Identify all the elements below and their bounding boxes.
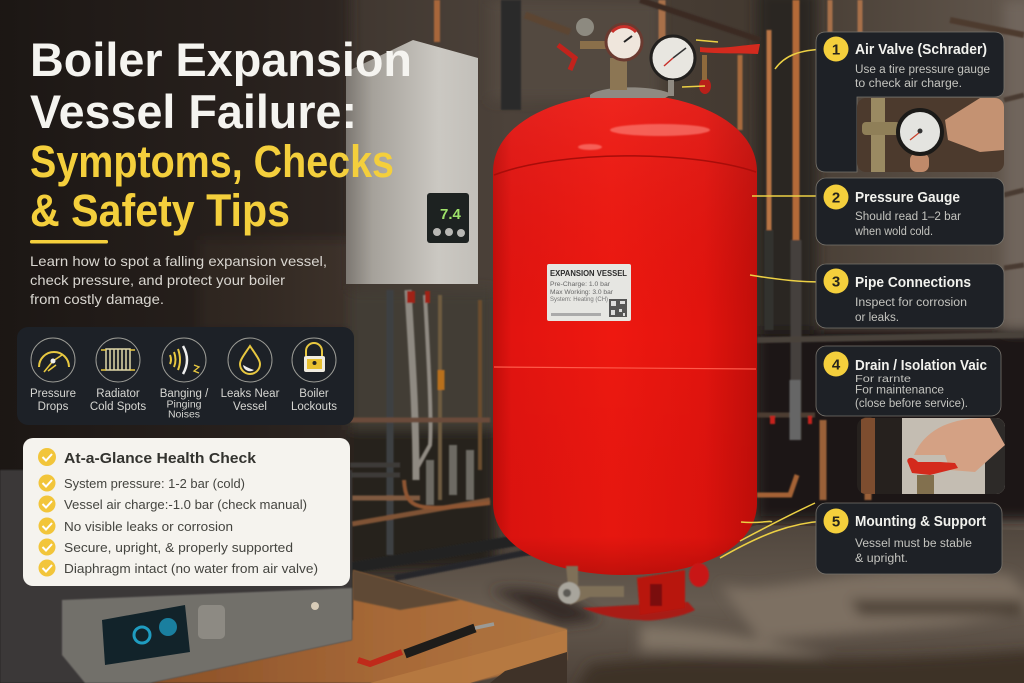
boiler unit [346, 40, 478, 284]
callout 3: pipe connections: Inspect for corrosion [855, 297, 967, 309]
subtitle: from costly damage. [30, 291, 164, 307]
label: leaks near vessel: Vessel [233, 401, 267, 413]
photo: hand on red valve [857, 418, 1005, 494]
callout 4: drain isolation valve: (close before service). [855, 398, 968, 410]
label: banging noises: Noises [168, 408, 200, 420]
check item: leaks: No visible leaks or corrosion [64, 519, 233, 534]
red expansion vessel [493, 94, 757, 575]
subtitle: check pressure, and protect your boiler [30, 272, 285, 288]
callout 1: air valve: Use a tire pressure gauge [855, 64, 990, 76]
title [30, 33, 412, 236]
callout 5: mounting and support: Mounting & Support [855, 514, 986, 530]
title: & Safety Tips [30, 185, 290, 236]
check item: system pressure: System pressure: 1-2 bar (cold) [64, 476, 245, 491]
vessel label [547, 264, 631, 321]
icon: padlock [292, 338, 336, 382]
callout 2: pressure gauge: 2 [832, 190, 840, 206]
label: boiler lockouts: Lockouts [291, 401, 337, 413]
icon: banging noise [162, 338, 206, 382]
machine screen [102, 605, 190, 665]
leader lines [682, 40, 825, 558]
background: concrete floor [395, 525, 1024, 683]
callout 1: air valve [816, 32, 1004, 172]
callout 1: air valve: 1 [832, 42, 840, 58]
vessel label: EXPANSION VESSEL [550, 269, 627, 278]
callout 2: pressure gauge: Should read 1–2 bar [855, 211, 961, 223]
label: pressure drops: Drops [38, 401, 69, 413]
callout 3: pipe connections: 3 [832, 274, 840, 290]
icon: leak droplet [228, 338, 272, 382]
label: radiator cold spots: Radiator [96, 388, 140, 400]
vessel label: Pre-Charge: 1.0 bar [550, 281, 611, 288]
callout 1: air valve: Air Valve (Schrader) [855, 42, 987, 58]
heading: At-a-Glance Health Check [64, 450, 257, 467]
label: leaks near vessel: Leaks Near [221, 388, 279, 400]
callout 4: drain isolation valve: 4 [832, 356, 841, 374]
title: Symptoms, Checks [30, 136, 394, 187]
callout 3: pipe connections: Pipe Connections [855, 275, 971, 291]
icon: pressure drops gauge [31, 338, 75, 382]
callout 3: pipe connections [816, 264, 1004, 328]
callout 2: pressure gauge [816, 178, 1004, 245]
check item: diaphragm: Diaphragm intact (no water from air valve) [64, 561, 318, 576]
tool on bench [358, 624, 494, 664]
callout 4: drain isolation valve: For maintenance [855, 384, 944, 396]
callout 5: mounting and support: & upright. [855, 553, 908, 565]
gauge: left pressure gauge [606, 24, 642, 60]
red isolation valve handle [700, 44, 760, 54]
title underline [30, 240, 108, 244]
callout 5: mounting and support [816, 503, 1002, 574]
callout 1: air valve: to check air charge. [855, 78, 962, 90]
title: Vessel Failure: [30, 85, 357, 138]
callout 4: drain isolation valve [816, 346, 1001, 416]
callout 4: drain isolation valve: Drain / Isolation Vaic [855, 358, 987, 374]
label: radiator cold spots: Cold Spots [90, 401, 146, 413]
label: pressure drops: Pressure [30, 388, 76, 400]
label: banging noises: Banging / [160, 388, 208, 400]
panel: symptoms icons [17, 327, 354, 425]
check item: vessel air charge: Vessel air charge:-1.0 bar (check manual) [64, 497, 307, 512]
title: Boiler Expansion [30, 33, 412, 86]
boiler display [427, 193, 469, 243]
callout 4: drain isolation valve: For rarnte [855, 374, 912, 385]
callout 5: mounting and support: Vessel must be stable [855, 538, 972, 550]
check item: secure: Secure, upright, & properly supported [64, 540, 293, 555]
pipes: behind the vessel and right wall [350, 0, 1024, 578]
icon: radiator [96, 338, 140, 382]
callout 2: pressure gauge: Pressure Gauge [855, 190, 960, 206]
callout 3: pipe connections: or leaks. [855, 312, 899, 324]
vessel label: Max Working: 3.0 bar [550, 289, 614, 296]
vessel label: System: Heating (CH) [550, 296, 608, 303]
label: boiler lockouts: Boiler [299, 388, 329, 400]
subtitle [30, 253, 327, 307]
boiler display: 7.4 [440, 206, 462, 223]
left-side dark overlay [0, 0, 350, 683]
callout 2: pressure gauge: when wold cold. [854, 226, 933, 238]
label: banging noises: Pinging [166, 398, 202, 410]
subtitle: Learn how to spot a falling expansion vessel, [30, 253, 327, 269]
top fittings and gauges [558, 18, 760, 98]
panel: at-a-glance health check [23, 438, 350, 586]
photo: gauge on valve [857, 98, 1004, 172]
vessel base, valve and mounting foot [558, 563, 709, 621]
workbench and machine [0, 470, 567, 683]
gauge: right pressure gauge [651, 36, 695, 96]
callout 5: mounting and support: 5 [832, 514, 840, 530]
